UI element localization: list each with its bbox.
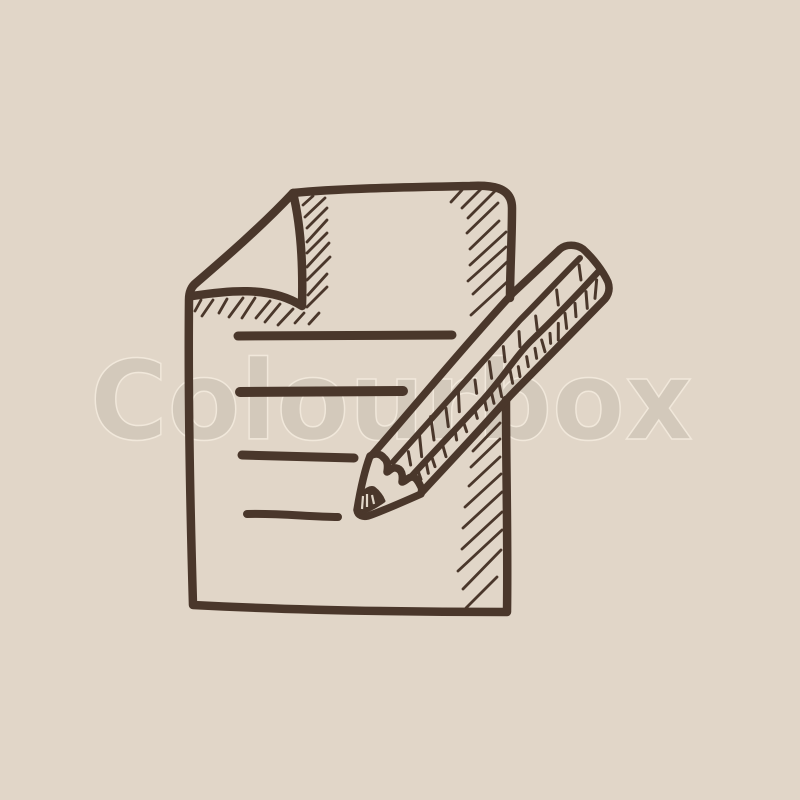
text line 3: [242, 455, 354, 458]
lead highlights: [362, 494, 374, 509]
folded corner: [192, 193, 302, 306]
pencil tip: [357, 454, 422, 516]
pencil lead: [359, 487, 384, 514]
pencil inner line lower: [410, 271, 599, 478]
icon: pencil: [357, 245, 609, 516]
hatching: next to fold: [195, 196, 330, 325]
watermark text: Colourbox: [90, 337, 693, 465]
hatching: top right: [451, 189, 507, 315]
pencil ticks: [408, 265, 597, 479]
text line 1: [238, 335, 452, 336]
hatching: lower right: [458, 423, 502, 608]
icon: sheet of paper with folded corner: [189, 186, 512, 612]
text line 2: [240, 391, 403, 392]
text line 4: [247, 514, 338, 517]
pencil inner line upper: [393, 258, 580, 462]
pencil body outline: [372, 245, 609, 493]
paper outline: [189, 186, 512, 612]
